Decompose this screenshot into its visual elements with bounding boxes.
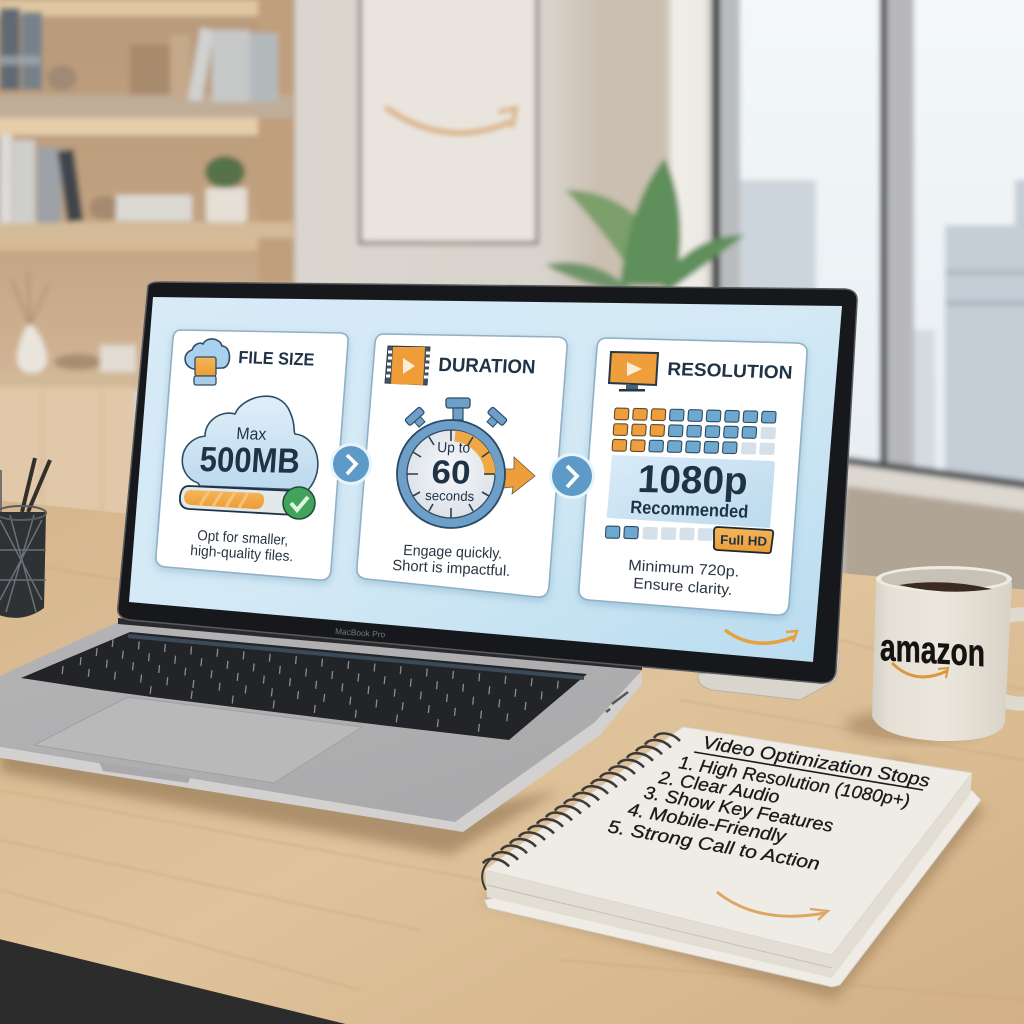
value: 1080p: 1080p	[636, 458, 749, 503]
badge: full hd	[714, 527, 773, 553]
coffee	[899, 582, 992, 592]
heading: resolution: RESOLUTION	[667, 358, 793, 383]
notebook top page	[485, 727, 972, 955]
notebook list: 2. Clear Audio	[656, 767, 781, 807]
laptop brand label: MacBook Pro	[335, 626, 386, 640]
panel: resolution	[579, 338, 807, 615]
label: seconds: seconds	[425, 488, 475, 504]
progress bar	[180, 486, 307, 515]
bookshelf	[0, 0, 295, 390]
pixel grid	[612, 408, 777, 455]
caption: duration	[392, 542, 511, 580]
lower cabinet	[0, 272, 136, 522]
caption: resolution: Minimum 720p.	[628, 557, 740, 581]
icon: stopwatch with arrow	[397, 398, 535, 528]
caption: file size: Opt for smaller,	[197, 528, 289, 549]
notebook list: 1. High Resolution (1080p+)	[677, 752, 911, 811]
front lip	[0, 672, 642, 832]
pencil holder	[0, 458, 50, 618]
icon: notebook smile	[717, 892, 828, 920]
notebook list: 4. Mobile-Friendly	[626, 799, 788, 847]
notebook pages	[485, 773, 972, 978]
notebook spiral	[483, 733, 680, 866]
caption: duration: Short is impactful.	[392, 557, 511, 580]
heading: file size: FILE SIZE	[238, 347, 315, 370]
panel: 1080p recommended	[607, 455, 775, 528]
icon: cloud with drive	[185, 339, 230, 385]
label: up to: Up to	[437, 440, 471, 457]
value: 60: 60	[431, 453, 471, 491]
screen	[129, 297, 842, 662]
desk front dark area	[0, 938, 370, 1024]
laptop shadow on desk	[0, 735, 560, 855]
caption: resolution	[628, 557, 740, 599]
caption: file size: high-quality files.	[190, 543, 294, 565]
panel: file size	[156, 330, 348, 580]
room background	[0, 0, 1024, 610]
notebook shadow	[480, 760, 985, 1000]
mug handle	[1000, 614, 1024, 704]
arrow	[503, 457, 535, 494]
desk wood grain	[0, 560, 1024, 1000]
mug shadow	[845, 709, 985, 741]
notebook spiral end loop	[482, 858, 492, 890]
label: recommended: Recommended	[630, 497, 749, 522]
badge: full hd: Full HD	[720, 532, 767, 549]
panel: duration	[357, 334, 567, 597]
window	[712, 0, 1024, 600]
notebook heading underline	[694, 752, 923, 790]
mug smile	[892, 663, 948, 678]
pixel row	[605, 526, 713, 541]
arrow: chevron 1	[330, 443, 372, 485]
mug brand text: amazon	[880, 627, 985, 675]
notebook heading: Video Optimization Stops	[701, 732, 931, 791]
label: max: Max	[236, 424, 267, 444]
icon: big cloud	[182, 396, 318, 490]
trackpad	[34, 697, 362, 783]
keyboard	[21, 632, 587, 740]
laptop lid bezel	[118, 282, 857, 683]
laptop hinge	[118, 618, 642, 670]
mug body	[872, 580, 1012, 741]
icon: monitor	[609, 352, 658, 392]
laptop stand	[698, 620, 840, 700]
laptop base	[0, 622, 642, 832]
caption: file size	[190, 528, 294, 565]
background plant	[545, 158, 745, 292]
notebook	[480, 727, 985, 1000]
icon: green check	[283, 487, 315, 519]
side ports	[606, 692, 628, 712]
heading: duration: DURATION	[438, 354, 536, 378]
notebook back cover	[484, 790, 981, 987]
value: 500MB: 500MB	[198, 440, 301, 481]
poster on wall	[360, 0, 537, 243]
icon: screen amazon smile	[725, 630, 797, 643]
notebook list: 5. Strong Call to Action	[606, 816, 821, 874]
icon: film strip	[385, 346, 430, 385]
caption: duration: Engage quickly.	[403, 542, 503, 562]
front notch	[99, 762, 191, 783]
deck	[0, 622, 642, 822]
desk	[0, 500, 1024, 1024]
caption: resolution: Ensure clarity.	[633, 575, 733, 599]
notebook list	[606, 752, 911, 874]
notebook list: 3. Show Key Features	[642, 782, 835, 836]
mug	[845, 566, 1024, 741]
arrow: chevron 2	[549, 453, 595, 499]
